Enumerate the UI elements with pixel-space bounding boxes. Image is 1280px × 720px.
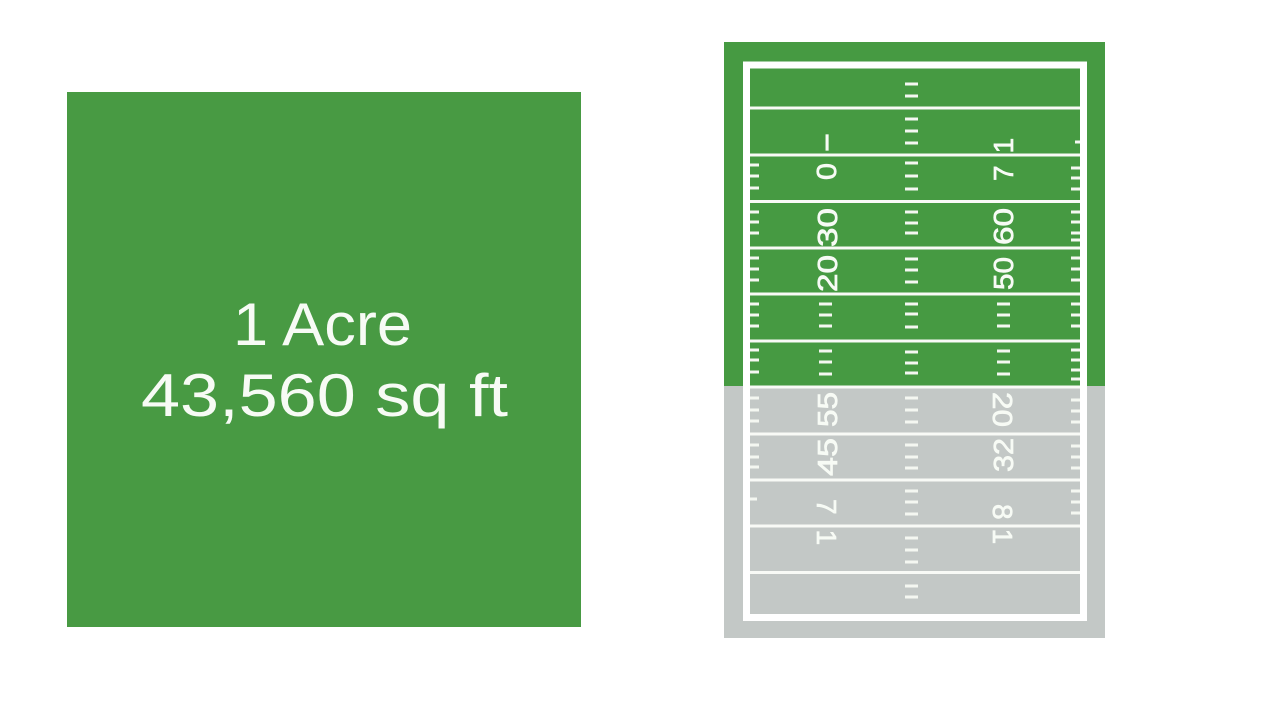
text: 43,560 sq ft: 43,560 sq ft [141,362,508,429]
right column yard numbers: 81 [987,504,1018,553]
field background: grey portion [724,386,1105,638]
left column yard numbers [809,135,843,560]
right column yard numbers: 50 [988,257,1019,290]
heading: 1 Acre: 1 Acre [233,291,412,358]
left column yard numbers: 71 [811,499,842,560]
center hash marks [905,84,918,597]
yard lines [750,108,1080,572]
right column yard numbers: 60 [988,208,1019,245]
panel: football field diagram [724,42,1105,638]
right sideline hash marks [1071,142,1080,513]
inner column hash marks [819,304,1010,374]
left column yard numbers: 20 [812,255,843,292]
left column yard numbers: 55 [812,392,843,427]
left sideline hash marks [750,165,759,499]
panel: one acre square [67,92,581,627]
field background: green portion [724,42,1105,386]
left column yard numbers: 45 [812,438,843,476]
left column yard numbers: 0 [811,163,842,180]
left column yard numbers: 30 [812,208,843,247]
right column yard numbers [987,126,1019,553]
right column yard numbers: 32 [988,438,1019,472]
field boundary [746,65,1084,618]
left column yard numbers: – [809,135,840,150]
right column yard numbers: 71 [988,126,1019,181]
right column yard numbers: 20 [987,392,1018,427]
